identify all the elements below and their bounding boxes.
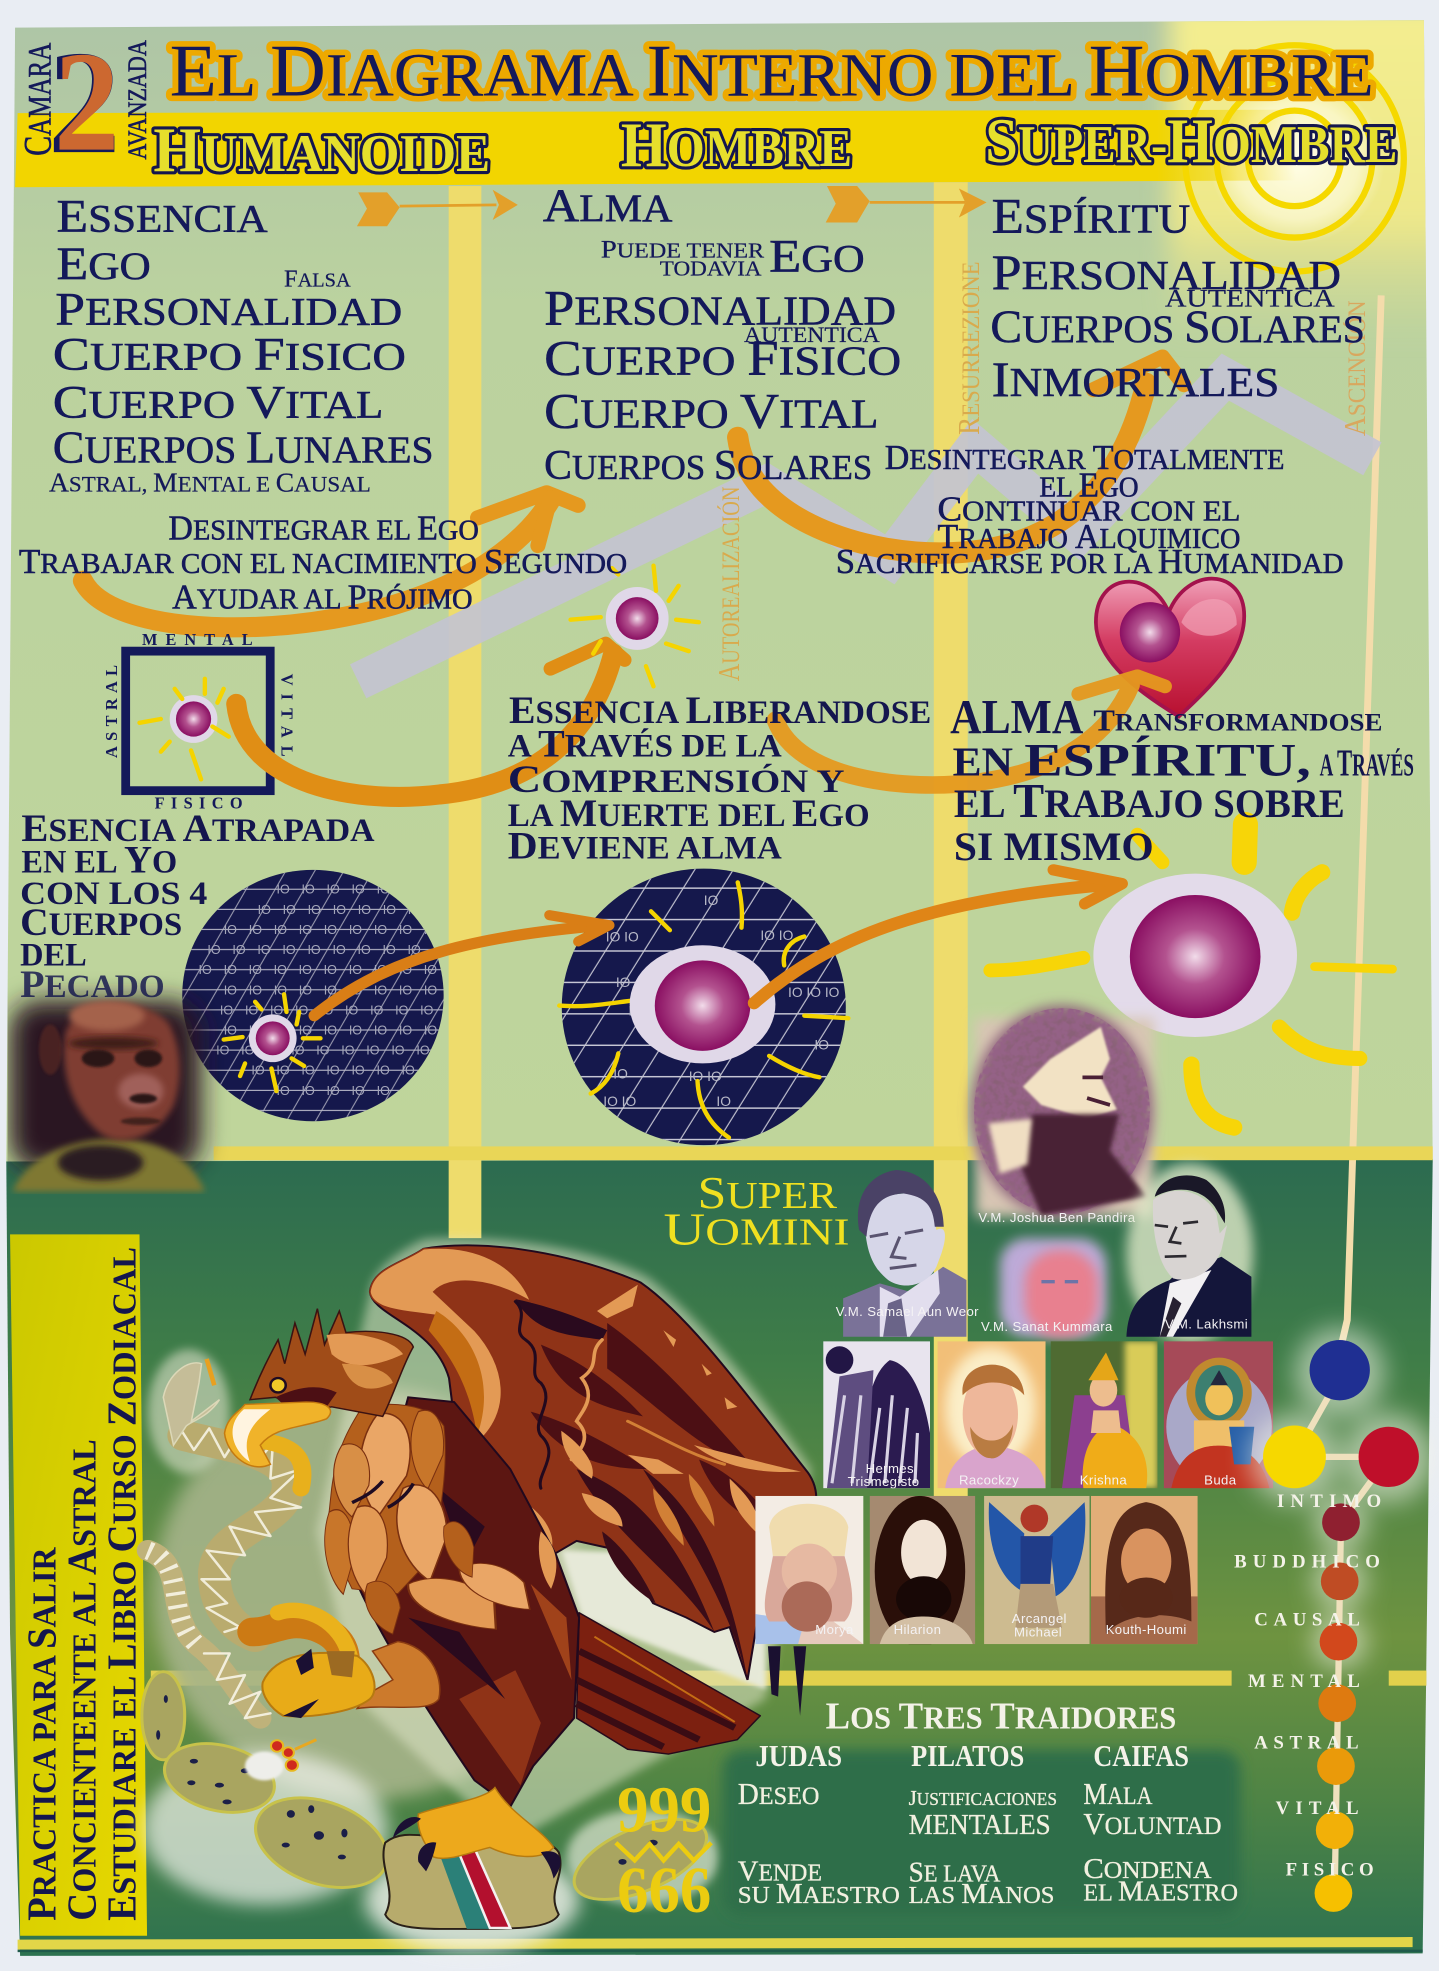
portrait: Hilarion (870, 1496, 975, 1647)
vertical yellow column 1 (449, 186, 481, 1238)
text block: super-hombre tasks: TRABAJO ALQUIMICO (938, 517, 1240, 556)
body feathers (408, 1488, 571, 1785)
serpent body (148, 1426, 350, 1718)
dark circle with IO grid: trapped essence (176, 867, 459, 1125)
middle small sun (571, 566, 699, 686)
peach ascension line (1330, 295, 1381, 1395)
table row two: SE LAVA (909, 1857, 1001, 1889)
large sun rays (990, 825, 1392, 1128)
text block: esencia atrapada: CON LOS 4 (20, 876, 207, 912)
yellow side panel (10, 1234, 147, 1936)
text block: humanoide list: ASTRAL, MENTAL E CAUSAL (49, 467, 371, 497)
number 999: 999 (617, 1774, 711, 1846)
beak highlight (233, 1409, 270, 1462)
node: red (1359, 1427, 1419, 1487)
bottom yellow rule (18, 1937, 1423, 1952)
text block: humanoide list (49, 190, 434, 497)
dark circle with IO grid: trapped essence: IO IO IO IO IO IO IO IO IO (216, 1044, 430, 1058)
large sun sphere (1093, 874, 1297, 1037)
node: yellow (1263, 1425, 1326, 1488)
dark circle with IO grid: liberating essence: IO (628, 1003, 643, 1019)
body labels: BUDDHICO (1234, 1551, 1380, 1572)
neck and chest feathers (322, 1404, 551, 1638)
text block: super-hombre tasks: CONTINUAR CON EL (938, 489, 1240, 528)
rock with flag band (383, 1835, 560, 1929)
table column names (755, 1739, 1189, 1773)
label: Mental: MENTAL (142, 630, 253, 649)
side text: line 1: PRACTICA PARA SALIR (19, 1547, 64, 1921)
dark circle with IO grid: liberating essence: IO (613, 1066, 628, 1082)
body labels: CAUSAL (1254, 1609, 1360, 1630)
portrait: Joshua Ben Pandira (971, 1006, 1154, 1225)
caption: Racockzy (959, 1473, 1019, 1488)
portrait: Buda (1164, 1341, 1273, 1488)
wing crest (370, 1248, 531, 1445)
body labels: ASTRAL (1254, 1733, 1359, 1754)
body (357, 1397, 579, 1807)
table row one: DESEO (738, 1777, 819, 1811)
dark circle with IO grid: liberating essence (553, 861, 855, 1150)
text block: esencia atrapada: CUERPOS (20, 901, 182, 944)
serpent head (163, 1359, 219, 1445)
table row two: EL MAESTRO (1083, 1876, 1238, 1908)
vertical label: Resurrezione: RESURREZIONE (952, 261, 986, 435)
portrait: Morya (755, 1496, 863, 1644)
connectors (1294, 1376, 1389, 1893)
eagle emblem (142, 1238, 816, 1953)
numeral 2 shadow: 2 (48, 21, 121, 185)
dark circle with IO grid: trapped essence: IO IO IO IO IO IO IO IO IO (224, 983, 437, 997)
text block: super-hombre list: CUERPOS SOLARES (990, 301, 1365, 353)
label: Avanzada: AVANZADA (122, 40, 152, 160)
text block: humanoide tasks (19, 508, 627, 616)
text block: essencia liberandose: A TRAVÉS DE LA (508, 723, 782, 766)
text block: esencia atrapada: ESENCIA ATRAPADA (21, 807, 375, 850)
portrait: Krishna (1051, 1341, 1157, 1488)
text block: alma transformandose: SI MISMO (954, 824, 1154, 869)
table row two: SU MAESTRO (738, 1878, 900, 1910)
small sun in square: sphere (140, 679, 229, 779)
text block: humanoide list: CUERPOS LUNARES (53, 423, 434, 473)
text block: super-hombre list: PERSONALIDAD (992, 245, 1341, 300)
portrait: Sanat Kummara (1000, 1238, 1106, 1337)
dark circle with IO grid: trapped essence: IO IO IO IO IO IO IO IO IO (224, 1024, 437, 1038)
text block: essencia liberandose: LA MUERTE DEL EGO (508, 792, 870, 835)
label: Vital: VITAL (278, 674, 297, 757)
dark circle with IO grid: liberating essence: IO (716, 1093, 731, 1109)
dark circle with IO grid: trapped essence: IO IO IO IO IO IO IO IO IO (224, 923, 437, 937)
horizontal yellow rule upper (214, 1146, 1433, 1160)
caption: Krishna (1080, 1473, 1127, 1488)
text block: hombre list (543, 180, 901, 489)
curved arrow: humanoide to hombre (83, 493, 578, 627)
nopal flower (245, 1740, 316, 1780)
dark circle with IO grid: liberating essence: IO IO (760, 927, 794, 943)
text block: hombre list: TODAVIA (660, 256, 762, 280)
portrait: Kouth-Houmi (1091, 1496, 1198, 1644)
text block: super-hombre tasks: DESINTEGRAR TOTALMENTE (885, 438, 1284, 477)
curved arrow: essence from square (236, 644, 625, 797)
text block: super-hombre list: AUTENTICA (1165, 286, 1335, 313)
tail feathers (577, 1613, 760, 1754)
heading: Super Uomini: SUPER (698, 1168, 838, 1218)
text block: hombre list: CUERPO VITAL (544, 383, 878, 438)
text block: super-hombre list (990, 189, 1365, 407)
grey zigzag evolution band (358, 377, 1372, 681)
dark circle with IO grid: trapped essence: IO IO IO IO IO IO (276, 883, 415, 897)
tree of life diagram (1234, 1327, 1434, 1912)
text block: super-hombre tasks: SACRIFICARSE POR LA HUMANIDAD (836, 542, 1343, 581)
node: blue (1310, 1340, 1370, 1400)
sphere in trapped essence (224, 994, 320, 1091)
text block: humanoide tasks: DESINTEGRAR EL EGO (168, 508, 479, 547)
numbers 999 and 666 (616, 1774, 711, 1927)
caption: Hilarion (894, 1622, 941, 1637)
title block (16, 21, 1374, 185)
table row one: VOLUNTAD (1083, 1807, 1222, 1841)
caption: Morya (815, 1622, 854, 1637)
table column names: JUDAS (755, 1739, 842, 1773)
column heading: Hombre: HOMBRE (621, 110, 852, 180)
body labels: MENTAL (1248, 1671, 1360, 1692)
dark circle with IO grid: liberating essence: IO IO IO (788, 984, 840, 1000)
text block: alma transformandose: EN (953, 739, 1013, 785)
text block: humanoide list: PERSONALIDAD (55, 283, 402, 335)
dark circle with IO grid: trapped essence: IO IO IO IO IO IO IO IO IO (207, 943, 421, 957)
table row two: LAS MANOS (909, 1878, 1054, 1910)
head (250, 1309, 413, 1416)
wing dark feathers (515, 1299, 776, 1680)
portrait: Samael Aun Weor (843, 1170, 966, 1337)
dark circle with IO grid: liberating essence: IO (704, 892, 719, 908)
text block: humanoide tasks: TRABAJAR CON EL NACIMIENTO SEGUNDO (19, 542, 627, 581)
text block: esencia atrapada (20, 807, 375, 1006)
cactus pads (142, 1672, 719, 1916)
text block: esencia atrapada: DEL (20, 937, 87, 973)
dark circle with IO grid: liberating essence: IO (814, 1037, 829, 1053)
arrows between numbers (616, 1843, 711, 1860)
vertical label: Ascención: ASCENCIÓN (1338, 300, 1372, 436)
text block: esencia atrapada: PECADO (20, 963, 165, 1006)
body labels (1234, 1491, 1381, 1880)
table row two (738, 1853, 1238, 1910)
left talon gripping serpent (262, 1649, 375, 1718)
glow behind nodes (1249, 1327, 1434, 1669)
table column names: PILATOS (911, 1739, 1024, 1773)
number 666: 666 (617, 1855, 711, 1927)
text block: hombre list: AUTENTICA (744, 322, 880, 347)
text block: alma transformandose (950, 689, 1414, 869)
panel: los tres traidores (723, 1695, 1240, 1916)
orange arrow: trapped to liberating (314, 915, 610, 1016)
glow behind eagle (143, 1238, 811, 1953)
horizontal yellow rule lower right (1389, 1671, 1426, 1686)
caption: Lakhsmi: V.M. Lakhsmi (1165, 1317, 1248, 1332)
caption: V.M. Joshua Ben Pandira (978, 1210, 1136, 1225)
concentric sun rings (1185, 45, 1404, 272)
side text: line 2: CONCIENTEENTE AL ASTRAL (60, 1439, 105, 1921)
portrait: Hermes Trismegisto: Trismegisto (848, 1474, 919, 1489)
label: Camara: CAMARA (16, 42, 59, 156)
wing light feather tips (526, 1285, 801, 1551)
text block: humanoide list: EGO (57, 238, 151, 290)
table row one: MENTALES (909, 1809, 1051, 1841)
table column names: CAIFAS (1093, 1739, 1189, 1773)
body circles (1315, 1503, 1360, 1912)
dark circle with IO grid: liberating essence: IO IO (603, 1093, 637, 1109)
portrait: Arcangel Michael (984, 1496, 1090, 1644)
text block: humanoide list: CUERPO VITAL (53, 376, 383, 428)
body labels: FISICO (1286, 1859, 1374, 1880)
wing scallop edges (515, 1301, 725, 1488)
caption: Sanat Kummara: V.M. Sanat Kummara (981, 1319, 1113, 1334)
horizontal yellow rule lower left (151, 1671, 1232, 1686)
dark hanging feather tips (768, 1646, 806, 1716)
heart with sphere (1096, 579, 1244, 716)
dark circle with IO grid: liberating essence: IO (616, 974, 631, 990)
body labels: INTIMO (1277, 1491, 1381, 1512)
text block: hombre list: ALMA (543, 180, 672, 232)
portrait: Hermes Trismegisto (823, 1341, 930, 1489)
text block: super-hombre list: INMORTALES (992, 352, 1279, 407)
body labels: VITAL (1276, 1798, 1359, 1819)
orange arrow: liberating to spirit (754, 870, 1122, 1003)
small arrow: hombre to super-hombre (826, 186, 987, 222)
text block: humanoide tasks: AYUDAR AL PRÓJIMO (172, 577, 473, 616)
panel: upper light green field (6, 20, 1433, 1163)
small arrow: humanoide to hombre (357, 190, 518, 226)
curved arrow: hombre to super-hombre (738, 357, 1184, 553)
portrait: Racockzy (938, 1341, 1046, 1488)
table row one (738, 1777, 1222, 1841)
main heading: EL DIAGRAMA INTERNO DEL HOMBRE (170, 30, 1374, 112)
text block: essencia liberandose: COMPRENSIÓN Y (508, 758, 845, 801)
side text: line 3: ESTUDIARE EL LIBRO CURSO ZODIACAL (100, 1247, 145, 1921)
text block: essencia liberandose (508, 689, 931, 868)
text block: essencia liberandose: DEVIENE ALMA (508, 825, 782, 868)
curved arrow: alma to heart (775, 676, 1165, 785)
dark circle with IO grid: liberating essence: IO IO (689, 1068, 722, 1084)
caption: Hermes (866, 1461, 914, 1476)
text block: alma transformandose: EL TRABAJO SOBRE (954, 775, 1345, 828)
text block: hombre list: PERSONALIDAD (544, 280, 896, 335)
wing base (370, 1245, 816, 1680)
yellow header band (15, 109, 1408, 187)
text block: super-hombre tasks: EL EGO (1039, 466, 1139, 505)
vertical yellow column 2 (934, 182, 968, 1497)
text block: hombre list: PUEDE TENER (601, 235, 765, 264)
text block: hombre list: CUERPOS SOLARES (544, 442, 872, 489)
portrait: humanoid (10, 1001, 205, 1192)
dark circle with IO grid: trapped essence: IO IO IO IO IO IO IO IO IO IO (199, 963, 437, 977)
text block: hombre list: CUERPO FISICO (544, 331, 901, 386)
table row one: MALA (1083, 1777, 1152, 1811)
label: Fisico: FISICO (155, 793, 243, 812)
top right yellow glow (1154, 20, 1426, 311)
dark circle with IO grid: trapped essence: IO IO IO IO IO (276, 1084, 390, 1098)
portrait: Lakhsmi (1126, 1163, 1253, 1343)
vertical label: Autorealización: AUTOREALIZACIÓN (712, 486, 746, 681)
text block: humanoide list: FALSA (284, 266, 351, 293)
text block: humanoide list: CUERPO FISICO (53, 329, 406, 381)
table row two: VENDE (738, 1855, 822, 1887)
text block: alma transformandose: TRANSFORMANDOSE (1093, 703, 1382, 737)
label: Astral: ASTRAL (102, 665, 121, 758)
caption: Samael Aun Weor: V.M. Samael Aun Weor (836, 1304, 979, 1319)
leg feathers (357, 1642, 440, 1709)
text block: alma transformandose: ESPÍRITU, (1024, 736, 1311, 787)
caption: Arcangel (1012, 1611, 1067, 1626)
dark circle with IO grid: trapped essence: IO IO IO IO IO IO IO IO (251, 1064, 440, 1078)
sphere in liberating essence (630, 945, 775, 1063)
caption: Kouth-Houmi (1106, 1622, 1187, 1637)
dark circle with IO grid: trapped essence: IO IO IO IO IO IO IO IO IO IO (220, 1003, 459, 1017)
text block: esencia atrapada: EN EL YO (21, 838, 177, 881)
text block: alma transformandose: ALMA (950, 689, 1084, 744)
table row two: CONDENA (1083, 1853, 1212, 1885)
beak (225, 1402, 331, 1467)
heading: Super Uomini (664, 1168, 850, 1254)
text block: super-hombre tasks (836, 438, 1343, 581)
portrait: Arcangel Michael: Michael (1014, 1625, 1062, 1640)
caption: Buda (1204, 1473, 1237, 1488)
text block: humanoide list: ESSENCIA (57, 190, 268, 242)
panel: lower dark green field (6, 1159, 1433, 1956)
text block: essencia liberandose: ESSENCIA LIBERANDOSE (509, 689, 931, 732)
right talon on rock (393, 1788, 561, 1879)
dark circle with IO grid: liberating essence: IO IO (606, 929, 639, 945)
heading: Super Uomini: U OMINI (664, 1204, 850, 1254)
traidores heading: LOS TRES TRAIDORES (826, 1695, 1176, 1737)
column heading: Super-Hombre: SUPER-HOMBRE (985, 106, 1398, 176)
column heading: Humanoide: HUMANOIDE (153, 115, 490, 185)
square of four bodies (126, 651, 270, 791)
table row one: JUSTIFICACIONES (909, 1786, 1057, 1810)
text block: hombre list: EGO (769, 231, 865, 283)
numeral 2: 2 (54, 22, 119, 181)
text block: super-hombre list: ESPÍRITU (992, 189, 1190, 244)
dark circle with IO grid: trapped essence: IO IO IO IO IO IO IO (258, 903, 421, 917)
